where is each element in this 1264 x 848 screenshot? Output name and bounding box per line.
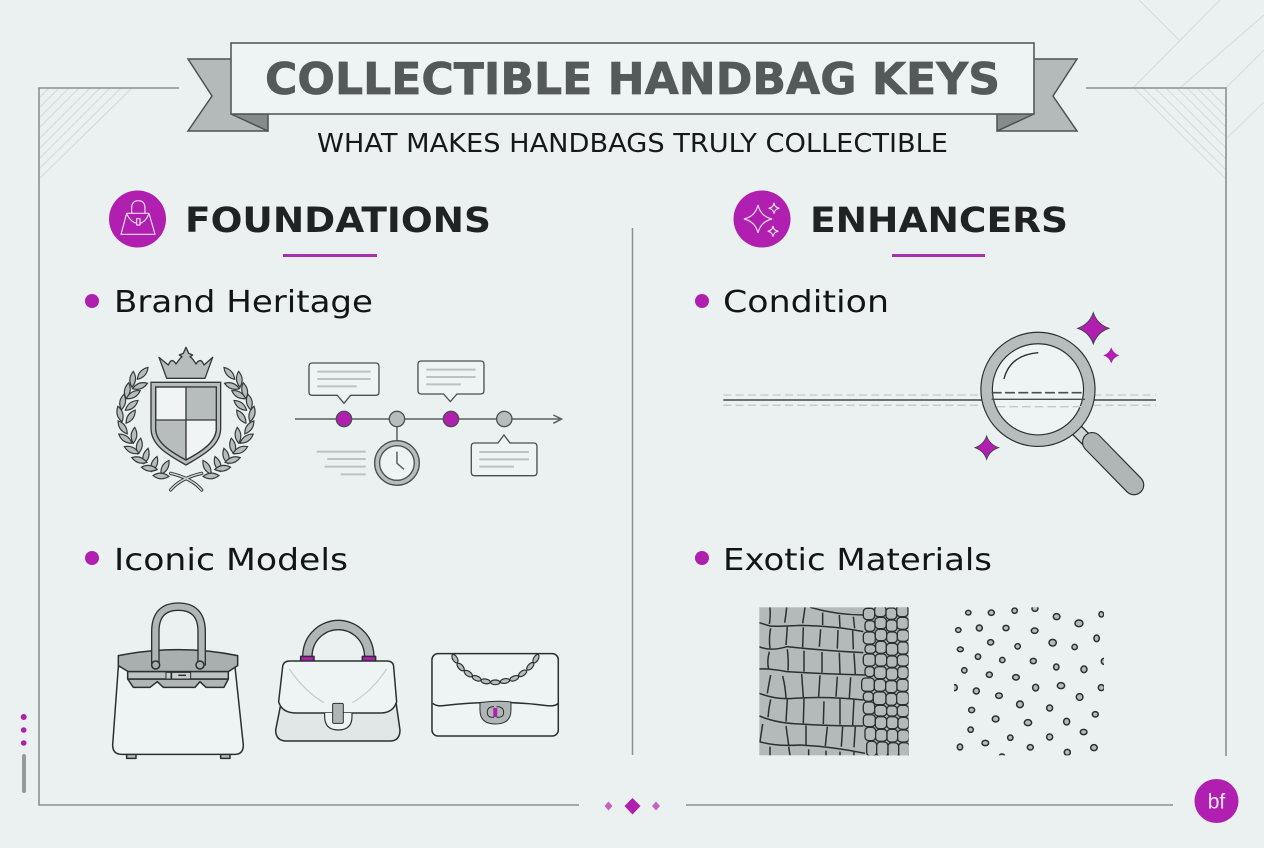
heading: foundations: FOUNDATIONS <box>185 201 491 241</box>
callout: second milestone <box>418 361 484 402</box>
callout: third milestone <box>471 435 537 476</box>
lens <box>987 338 1089 441</box>
shield <box>151 382 221 465</box>
subtitle: WHAT MAKES HANDBAGS TRULY COLLECTIBLE <box>317 129 948 159</box>
bag: top handle flap <box>276 625 400 741</box>
callout: first milestone <box>309 363 379 403</box>
clock caption lines <box>317 452 366 474</box>
item: condition: Condition <box>723 285 889 320</box>
logo badge: bf <box>1208 790 1225 814</box>
decoration: top-right corner lines <box>1133 0 1264 179</box>
timeline chart <box>295 361 562 485</box>
handle <box>1077 430 1134 485</box>
heading: enhancers: ENHANCERS <box>810 201 1068 241</box>
clock connector <box>395 427 399 441</box>
sparkles <box>975 313 1119 459</box>
decoration: top-left corner hatching <box>39 88 132 179</box>
heading underline <box>892 254 985 257</box>
title banner <box>188 43 1077 131</box>
handbag illustrations <box>113 607 558 758</box>
title: COLLECTIBLE HANDBAG KEYS <box>265 54 1000 105</box>
timeline axis <box>295 415 562 423</box>
right ribbon tail <box>997 59 1077 131</box>
page frame <box>39 88 1226 805</box>
center divider <box>632 228 634 755</box>
crown <box>159 347 213 378</box>
panel: enhancers <box>695 190 1156 758</box>
bag: quilted chain flap <box>432 653 558 736</box>
right laurel <box>201 365 257 479</box>
footer ornament: diamonds <box>604 798 660 814</box>
texture: ostrich quill dots <box>952 606 1107 758</box>
small scales <box>862 605 909 757</box>
icon: handbag badge <box>109 190 166 248</box>
item: exotic materials: Exotic Materials <box>723 543 992 578</box>
timeline nodes <box>336 411 512 427</box>
item: brand heritage: Brand Heritage <box>114 285 373 320</box>
icon: heraldic crest <box>115 347 257 490</box>
stitch line <box>723 395 1156 405</box>
icon: sparkle badge <box>734 190 790 248</box>
logo badge <box>1194 779 1238 823</box>
heading underline <box>283 254 377 257</box>
side ornament: dots and bar <box>21 714 27 793</box>
crossed stems <box>171 473 202 490</box>
banner plate <box>231 43 1034 114</box>
chain strap <box>451 653 540 685</box>
left laurel <box>115 365 171 479</box>
panel: foundations <box>85 190 562 758</box>
icon: clock <box>375 441 419 485</box>
illustration: magnifier over stitching <box>723 313 1156 485</box>
left ribbon tail <box>188 59 268 131</box>
item: iconic models: Iconic Models <box>114 543 348 578</box>
turn lock <box>480 701 511 724</box>
bag: structured tote <box>113 607 243 758</box>
texture: crocodile leather <box>759 605 909 757</box>
